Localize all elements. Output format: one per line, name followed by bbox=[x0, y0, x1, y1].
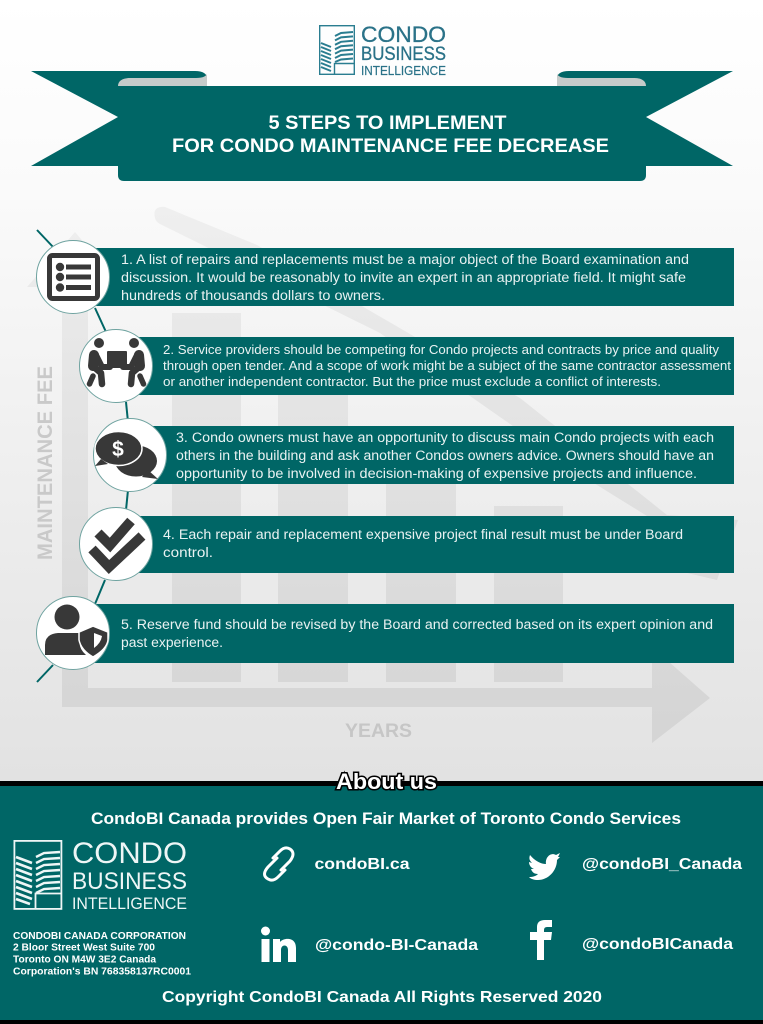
step 5 text: 5. Reserve fund should be revised by the Board and corrected based on its expert opinion and bbox=[121, 617, 713, 632]
step 5 bbox=[36, 596, 734, 670]
company address bbox=[13, 930, 191, 978]
top logo bbox=[320, 22, 446, 78]
step 2: or another independent contractor. But the price must exclude a conflict of interests. bbox=[163, 375, 661, 389]
company address: 2 Bloor Street West Suite 700 bbox=[13, 942, 155, 954]
step 4 bar bbox=[135, 516, 734, 573]
ribbon tails bbox=[31, 71, 207, 166]
website link text: condoBI.ca bbox=[314, 856, 410, 873]
chart axes bbox=[27, 232, 710, 743]
twitter handle: @condoBI_Canada bbox=[582, 856, 742, 873]
timeline connector line bbox=[37, 230, 128, 682]
icon: speech bubbles with dollar bbox=[94, 418, 166, 492]
icon: double check mark bbox=[80, 508, 152, 580]
linkedin handle: @condo-BI-Canada bbox=[315, 937, 478, 954]
step 2: through open tender. And a scope of work might be a subject of the same contractor assessment bbox=[163, 359, 732, 373]
ribbon main panel bbox=[118, 86, 646, 181]
step 2 bbox=[80, 330, 734, 402]
footer logo: BUSINESS bbox=[72, 868, 187, 895]
y axis label: MAINTENANCE FEE bbox=[34, 366, 57, 560]
step 3 bbox=[94, 418, 734, 492]
company address: Toronto ON M4W 3E2 Canada bbox=[13, 954, 156, 966]
footer panel bbox=[0, 769, 763, 1024]
top logo: BUSINESS bbox=[361, 44, 446, 65]
company address: Corporation's BN 768358137RC0001 bbox=[13, 966, 191, 978]
chart bars bbox=[172, 313, 563, 682]
step 3: opportunity to be involved in decision-making of expensive projects and influence. bbox=[176, 466, 697, 481]
step 3 text: 3. Condo owners must have an opportunity to discuss main Condo projects with each bbox=[176, 430, 714, 445]
step 1 bbox=[36, 240, 734, 314]
title ribbon banner bbox=[31, 71, 733, 181]
step 4 bbox=[80, 508, 734, 580]
step 5: past experience. bbox=[121, 635, 223, 650]
step 3: others in the building and ask another Condos owners advice. Owners should have an bbox=[176, 448, 714, 463]
step 4 text: 4. Each repair and replacement expensive project final result must be under Board bbox=[163, 527, 683, 542]
icon: linkedin bbox=[261, 926, 296, 962]
step 1: hundreds of thousands dollars to owners. bbox=[121, 288, 385, 303]
step 3 bar bbox=[150, 426, 734, 484]
icon: twitter bird bbox=[529, 853, 560, 880]
footer headline: CondoBI Canada provides Open Fair Market of Toronto Condo Services bbox=[91, 810, 681, 828]
step 5 bar bbox=[95, 604, 734, 663]
icon: speech bubbles with dollar: $ bbox=[112, 438, 124, 461]
facebook handle: @condoBICanada bbox=[582, 936, 733, 953]
footer logo bbox=[14, 837, 187, 913]
step 2 text: 2. Service providers should be competing for Condo projects and contracts by price and quality bbox=[163, 343, 720, 357]
footer logo wordmark: CONDO bbox=[72, 837, 187, 870]
ribbon curls bbox=[118, 73, 207, 86]
footer logo: INTELLIGENCE bbox=[72, 894, 187, 913]
company address: CONDOBI CANADA CORPORATION bbox=[13, 930, 186, 942]
about us heading: About us bbox=[336, 769, 437, 794]
step 2 bar bbox=[135, 337, 734, 395]
step 4: control. bbox=[163, 545, 213, 560]
step 1: discussion. It would be reasonably to invite an expert in an appropriate field. It might safe bbox=[121, 270, 686, 285]
icon: two people carrying box bbox=[80, 330, 152, 402]
icon: link bbox=[264, 848, 293, 880]
logo building icon bbox=[320, 26, 354, 74]
chart downward arrow bbox=[154, 207, 738, 580]
banner title: 5 STEPS TO IMPLEMENT bbox=[268, 113, 507, 134]
copyright: Copyright CondoBI Canada All Rights Reserved 2020 bbox=[162, 989, 602, 1006]
top logo: INTELLIGENCE bbox=[361, 63, 446, 78]
title ribbon banner: FOR CONDO MAINTENANCE FEE DECREASE bbox=[172, 136, 609, 157]
logo wordmark: CONDO bbox=[361, 22, 446, 47]
footer logo building icon bbox=[14, 841, 61, 909]
icon: checklist bbox=[36, 240, 110, 314]
step 1 bar bbox=[95, 248, 734, 306]
icon: person with shield bbox=[36, 596, 110, 670]
x axis label: YEARS bbox=[345, 721, 412, 742]
background chart bbox=[27, 207, 738, 743]
step 1 text: 1. A list of repairs and replacements must be a major object of the Board examination and bbox=[121, 252, 689, 267]
icon: facebook bbox=[530, 920, 552, 960]
